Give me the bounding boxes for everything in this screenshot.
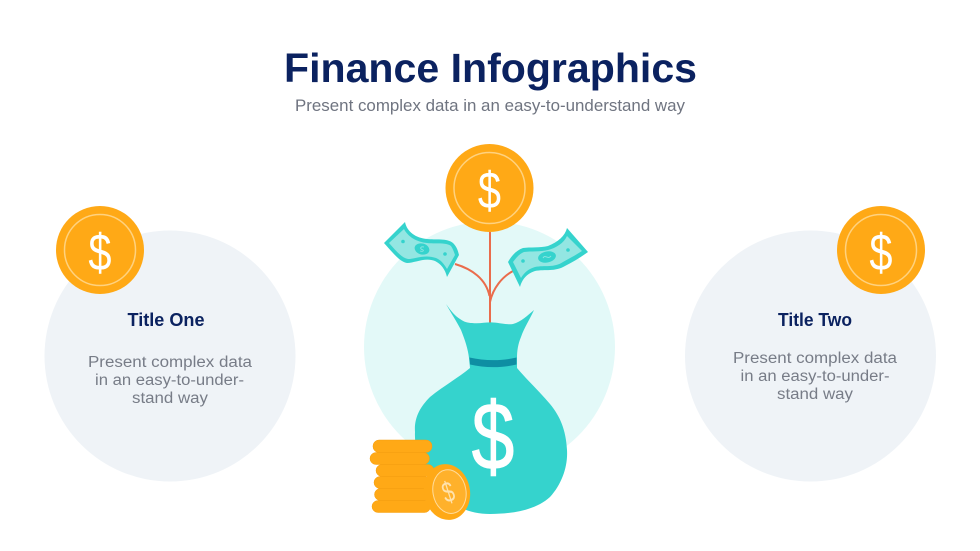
text block: Present complex data bbox=[88, 354, 252, 371]
icon: dollar coin: $ bbox=[88, 223, 112, 281]
subtitle: Present complex data in an easy-to-understand way bbox=[295, 97, 686, 115]
icon: top dollar coin bbox=[446, 144, 534, 232]
panel background circle bbox=[685, 230, 936, 482]
panel background circle bbox=[44, 230, 296, 482]
icon: money bag bbox=[415, 304, 567, 514]
icon: dollar coin: $ bbox=[869, 223, 893, 281]
icon: dollar coin bbox=[837, 206, 925, 294]
icon: left banknote bbox=[384, 222, 459, 277]
heading: Title One bbox=[128, 310, 204, 330]
background circle bbox=[364, 222, 615, 472]
title: Finance Infographics bbox=[284, 45, 697, 91]
text block: in an easy-to-under- bbox=[95, 372, 244, 389]
text block: stand way bbox=[132, 390, 208, 407]
text block: Present complex data bbox=[733, 350, 897, 367]
icon: tilted coin: $ bbox=[438, 475, 459, 510]
central illustration: money bag plant bbox=[364, 144, 615, 524]
panel: title two bbox=[685, 206, 936, 482]
heading: Title Two bbox=[778, 310, 852, 330]
text block: stand way bbox=[777, 386, 853, 403]
icon: dollar coin bbox=[56, 206, 144, 294]
text block bbox=[733, 350, 897, 403]
stem and branches bbox=[455, 232, 513, 324]
icon: tilted coin bbox=[419, 460, 475, 524]
icon: right banknote bbox=[508, 228, 588, 287]
panel: title one bbox=[44, 206, 296, 482]
text block: in an easy-to-under- bbox=[740, 368, 890, 385]
text block bbox=[88, 354, 252, 407]
icon: money bag: $ bbox=[472, 383, 514, 490]
icon: top dollar coin: $ bbox=[478, 161, 501, 219]
icon: coin stack bbox=[370, 440, 434, 512]
